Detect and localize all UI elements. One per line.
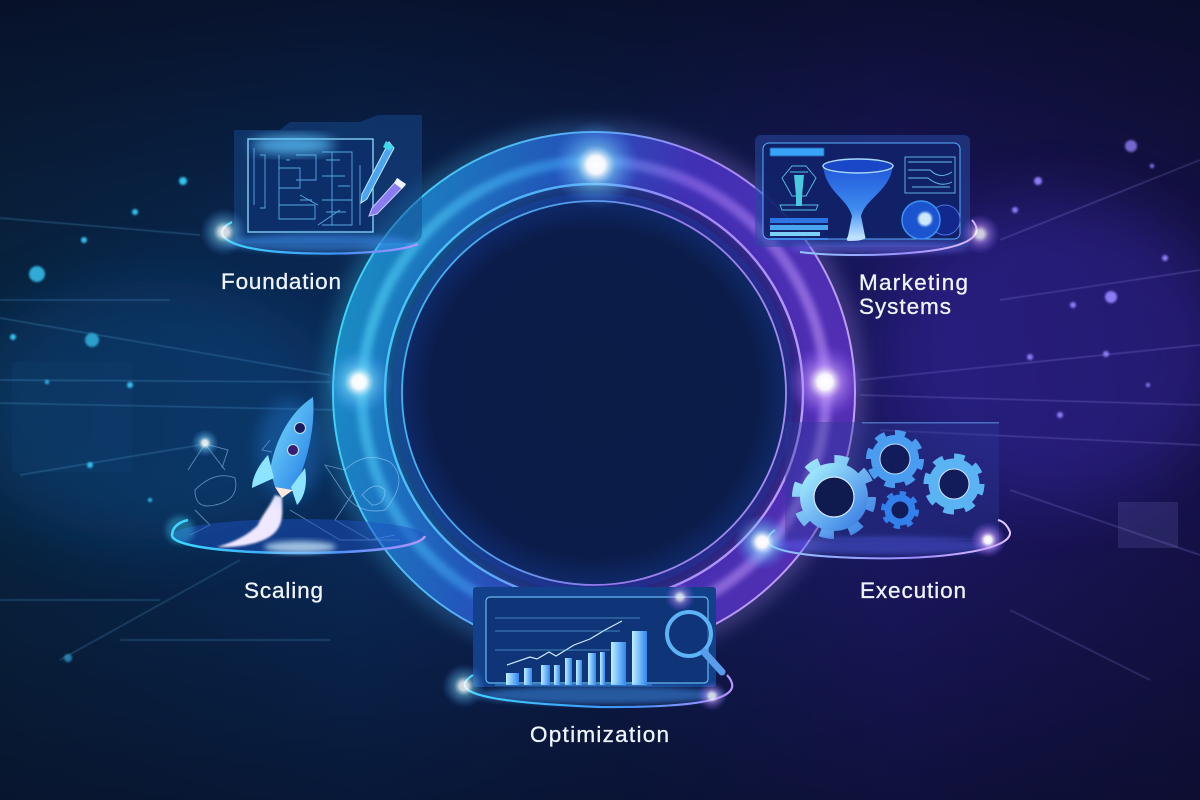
label: Execution: Execution bbox=[860, 578, 966, 603]
bar chart bbox=[506, 631, 647, 685]
disc bbox=[734, 514, 1010, 570]
panel: Marketing Systems bbox=[755, 135, 1000, 255]
icon: right gear bbox=[928, 458, 980, 510]
ring glow node: left bbox=[325, 348, 393, 416]
label: Scaling: Scaling bbox=[244, 578, 323, 603]
trend line bbox=[507, 621, 622, 665]
disc bbox=[790, 214, 1000, 255]
label: Marketing Systems: Systems bbox=[859, 294, 951, 319]
header strip bbox=[770, 148, 824, 156]
network lines bbox=[188, 440, 400, 540]
disc bbox=[200, 208, 418, 256]
ring glow node: top bbox=[552, 121, 640, 209]
schematic: trophy bbox=[780, 166, 818, 210]
schematic: wiring bbox=[905, 157, 955, 193]
ring glow node: right bbox=[787, 344, 863, 420]
label: Optimization: Optimization bbox=[530, 722, 669, 747]
icon: pencil bbox=[361, 141, 394, 203]
icon: rocket bbox=[252, 397, 322, 505]
label: Marketing Systems bbox=[859, 270, 968, 319]
blueprint sheet bbox=[248, 139, 373, 232]
chart axis bbox=[495, 618, 652, 685]
icon: magnifier bbox=[667, 612, 722, 672]
label: Marketing Systems: Marketing bbox=[859, 270, 968, 295]
icon: globes bbox=[902, 201, 960, 239]
icon: top gear bbox=[870, 434, 920, 484]
panel: Foundation bbox=[200, 115, 422, 256]
panel: Scaling bbox=[166, 397, 425, 553]
panel: Optimization bbox=[442, 582, 732, 711]
icon: flame bbox=[217, 495, 282, 547]
disc bbox=[166, 516, 425, 553]
label: Foundation: Foundation bbox=[221, 269, 341, 294]
icon: small gear bbox=[884, 494, 916, 526]
panel: Execution bbox=[734, 422, 1010, 570]
disc bbox=[442, 582, 732, 711]
icon: large gear bbox=[799, 462, 869, 532]
central ring bbox=[325, 121, 863, 654]
icon: crayon bbox=[369, 178, 406, 216]
icon: funnel bbox=[823, 159, 893, 241]
data rows bbox=[770, 218, 828, 240]
